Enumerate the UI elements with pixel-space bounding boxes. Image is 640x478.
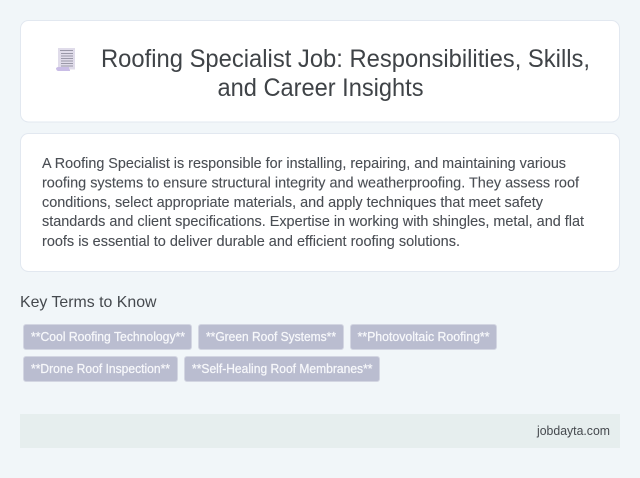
tag: green roof systems (198, 324, 344, 350)
description text: roofing systems to ensure structural integrity and weatherproofing. They assess roof (42, 176, 580, 192)
tag: drone roof inspection (24, 356, 178, 382)
heading: key terms: Key Terms to Know (20, 294, 157, 311)
description text: standards and client specifications. Expertise in working with shingles, metal, and flat (42, 214, 584, 230)
tag: cool roofing technology: **Cool Roofing Technology** (31, 330, 185, 344)
description text: roofs is essential to deliver durable and efficient roofing solutions. (42, 234, 460, 250)
footer bar (20, 414, 620, 448)
tag: self-healing roof membranes: **Self-Healing Roof Membranes** (192, 362, 373, 376)
icon: document scroll (56, 48, 75, 71)
title: and Career Insights (218, 74, 424, 102)
panel: description card (20, 134, 620, 272)
description text (42, 156, 584, 250)
tag: cool roofing technology (24, 324, 192, 350)
footer source text: jobdayta.com (536, 424, 610, 438)
panel: title card (20, 20, 620, 122)
description text: A Roofing Specialist is responsible for installing, repairing, and maintaining various (42, 156, 566, 172)
key term tags (24, 324, 496, 382)
tag: photovoltaic roofing (350, 324, 496, 350)
title (101, 45, 590, 102)
title: Roofing Specialist Job: Responsibilities, Skills, (101, 45, 590, 73)
tag: green roof systems: **Green Roof Systems** (206, 330, 336, 344)
tag: self-healing roof membranes (184, 356, 380, 382)
tag: drone roof inspection: **Drone Roof Inspection** (31, 362, 170, 376)
tag: photovoltaic roofing: **Photovoltaic Roofing** (358, 330, 490, 344)
description text: conditions, select appropriate materials, and apply techniques that meet safety (42, 195, 544, 211)
